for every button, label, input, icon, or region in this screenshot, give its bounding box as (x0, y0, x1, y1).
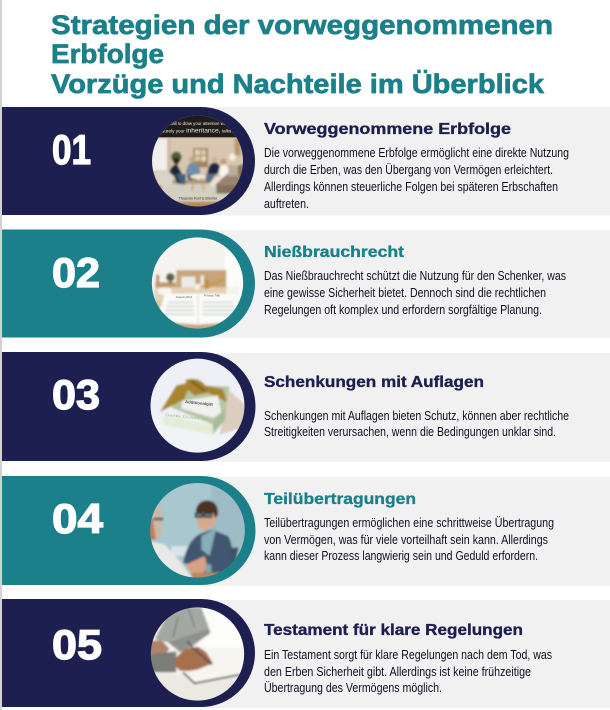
panel: 05 Testament für klare Regelungen (2, 599, 610, 708)
gift tag text: Gently DLised ties (165, 412, 210, 422)
description: durch die Erben, was den Übergang von Vermögen erleichtert. (264, 163, 553, 177)
number band (2, 107, 255, 215)
number: 01 (52, 126, 91, 173)
description (264, 269, 566, 317)
number band (2, 476, 255, 585)
description: Übertragung des Vermögens möglich. (264, 681, 442, 695)
description: von Vermögen, was für viele vorteilhaft sein kann. Allerdings (264, 533, 548, 547)
photo: hand writing in notebook (150, 607, 244, 701)
photo: gift box with gold ribbon (150, 358, 244, 453)
book page headings (176, 294, 220, 298)
book page headings: Privacy Talk (204, 294, 220, 298)
title: Strategien der vorweggenommenen (51, 10, 553, 40)
panel: 03 Schenkungen mit Auflagen (2, 352, 610, 462)
number: 03 (52, 371, 100, 418)
title (51, 10, 553, 99)
number band (2, 352, 255, 461)
description: kann dieser Prozess langwierig sein und Geduld erfordern. (264, 549, 538, 563)
photo banner (158, 116, 236, 138)
description: Streitigkeiten verursachen, wenn die Bedingungen unklar sind. (264, 425, 556, 439)
number: 05 (52, 621, 102, 668)
number: 02 (52, 249, 100, 296)
title: Vorzüge und Nachteile im Überblick (51, 69, 545, 99)
description: Ein Testament sorgt für klare Regelungen nach dem Tod, was (264, 648, 552, 662)
heading: Schenkungen mit Auflagen (264, 374, 484, 391)
description (264, 516, 554, 563)
panel: 04 Teilübertragungen (2, 476, 610, 586)
description (264, 648, 552, 695)
panel: 02 Nießbrauchrecht (2, 230, 610, 338)
text panel background (201, 353, 610, 462)
panel: 01 Vorweggenommene Erbfolge (2, 107, 610, 216)
number band (2, 599, 255, 707)
description: Allerdings können steuerliche Folgen bei späteren Erbschaften (264, 180, 558, 194)
description (264, 409, 569, 439)
photo caption text: surely your inheritance, talks? (162, 128, 234, 135)
text panel background (201, 600, 610, 708)
heading: Teilübertragungen (264, 491, 416, 508)
gift tag text: Additionalgift (185, 399, 214, 407)
title: Erbfolge (51, 39, 164, 69)
number: 04 (52, 495, 104, 542)
text panel background (201, 230, 610, 338)
description: den Erben Sicherheit gibt. Allerdings ist keine frühzeitige (264, 665, 531, 679)
text panel background (201, 477, 610, 586)
heading: Nießbrauchrecht (264, 244, 405, 261)
description: Teilübertragungen ermöglichen eine schrittweise Übertragung (264, 516, 554, 530)
book page headings: August 2011 (176, 295, 193, 299)
photo caption text (162, 121, 234, 200)
text panel background (201, 107, 610, 216)
heading: Testament für klare Regelungen (264, 622, 523, 639)
description: Regelungen oft komplex und erfordern sorgfältige Planung. (264, 303, 542, 317)
heading: Vorweggenommene Erbfolge (264, 121, 511, 138)
photo caption text: Treasure Kurt & Bremer (179, 196, 218, 200)
gift tag text (166, 400, 213, 421)
photo caption text: f call to draw your attention with (168, 121, 229, 126)
description: auftreten. (264, 197, 309, 211)
photo: man in blazer at meeting (148, 481, 248, 581)
photo: family in living room (152, 116, 243, 206)
description: eine gewisse Sicherheit bietet. Dennoch sind die rechtlichen (264, 286, 546, 300)
photo: open contract book in bright room (152, 237, 244, 329)
number band (2, 230, 255, 338)
description (264, 146, 569, 211)
